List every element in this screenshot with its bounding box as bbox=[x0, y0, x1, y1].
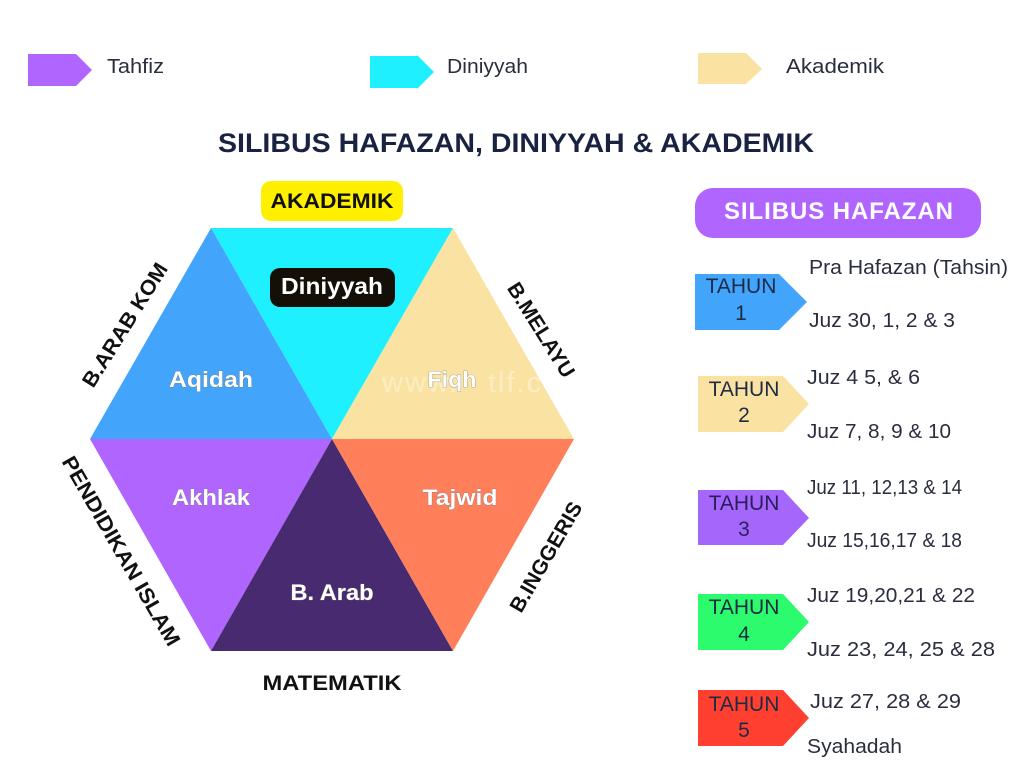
year 3 text bbox=[807, 476, 962, 552]
label: Tajwid: Tajwid bbox=[422, 485, 498, 510]
label: Diniyyah badge bbox=[270, 268, 395, 307]
year 2 text: Juz 4 5, & 6 bbox=[807, 366, 920, 389]
year 3 arrow bbox=[698, 490, 809, 545]
label: AKADEMIK badge: AKADEMIK bbox=[270, 189, 394, 213]
year 3 text: Juz 11, 12,13 & 14 bbox=[807, 476, 962, 499]
year 1 text bbox=[809, 256, 1008, 332]
year 1 text: Juz 30, 1, 2 & 3 bbox=[809, 309, 955, 332]
year 4 arrow: 4 bbox=[738, 623, 750, 646]
year 2 text: Juz 7, 8, 9 & 10 bbox=[807, 420, 951, 443]
segment: Aqidah bbox=[90, 228, 332, 439]
year 5 text: Juz 27, 28 & 29 bbox=[810, 690, 961, 713]
label: AKADEMIK badge bbox=[261, 181, 403, 221]
year 2 arrow bbox=[698, 376, 809, 432]
side label: PENDIDIKAN ISLAM: PENDIDIKAN ISLAM bbox=[57, 452, 184, 650]
segment: B. Arab bbox=[211, 439, 453, 651]
segment: Fiqh bbox=[332, 228, 574, 439]
legend: Diniyyah: Diniyyah bbox=[447, 56, 528, 78]
label: Diniyyah badge: Diniyyah bbox=[281, 273, 383, 299]
watermark: tlf.c bbox=[488, 367, 543, 399]
year 1 text: Pra Hafazan (Tahsin) bbox=[809, 256, 1008, 279]
year 4 arrow bbox=[698, 594, 809, 650]
side label: MATEMATIK: MATEMATIK bbox=[262, 672, 402, 695]
year 4 text: Juz 23, 24, 25 & 28 bbox=[807, 638, 995, 661]
year 3 arrow: TAHUN bbox=[709, 492, 779, 515]
year 2 arrow: TAHUN bbox=[709, 378, 779, 401]
year 5 arrow bbox=[698, 690, 809, 746]
segment: Akhlak bbox=[90, 439, 332, 651]
year 2 arrow: 2 bbox=[738, 404, 750, 427]
year 1 arrow: TAHUN bbox=[706, 275, 776, 298]
year 5 text: Syahadah bbox=[807, 735, 902, 758]
label: Akhlak: Akhlak bbox=[172, 485, 251, 510]
heading: SILIBUS HAFAZAN bbox=[695, 188, 981, 238]
side label: B.INGGERIS: B.INGGERIS bbox=[506, 498, 587, 617]
watermark: www. bbox=[381, 367, 459, 399]
segment: Tajwid bbox=[332, 439, 574, 651]
hexagon chart bbox=[90, 228, 574, 651]
year 3 arrow: 3 bbox=[738, 518, 750, 541]
segment: Diniyyah bbox=[211, 228, 453, 439]
legend: Diniyyah bbox=[370, 56, 528, 88]
title: SILIBUS HAFAZAN, DINIYYAH & AKADEMIK bbox=[218, 128, 815, 158]
year 5 arrow: 5 bbox=[738, 719, 750, 742]
legend: Akademik bbox=[698, 53, 885, 84]
legend: Tahfiz: Tahfiz bbox=[107, 56, 164, 78]
year 1 arrow bbox=[695, 274, 807, 330]
year 2 text bbox=[807, 366, 951, 443]
year 4 arrow: TAHUN bbox=[709, 596, 779, 619]
legend: Tahfiz bbox=[28, 54, 164, 86]
year 4 text bbox=[807, 584, 995, 661]
side label: B.ARAB KOM: B.ARAB KOM bbox=[78, 259, 173, 392]
year 1 arrow: 1 bbox=[735, 302, 747, 325]
label: Aqidah: Aqidah bbox=[169, 367, 253, 392]
year 5 arrow: TAHUN bbox=[709, 693, 779, 716]
side label: B.MELAYU: B.MELAYU bbox=[502, 278, 579, 382]
label: Fiqh: Fiqh bbox=[428, 367, 476, 392]
legend: Akademik: Akademik bbox=[786, 56, 885, 78]
year 4 text: Juz 19,20,21 & 22 bbox=[807, 584, 975, 607]
year 5 text bbox=[807, 690, 961, 758]
label: B. Arab: B. Arab bbox=[290, 580, 374, 605]
year 3 text: Juz 15,16,17 & 18 bbox=[807, 529, 962, 552]
heading: SILIBUS HAFAZAN: SILIBUS HAFAZAN bbox=[724, 198, 953, 225]
